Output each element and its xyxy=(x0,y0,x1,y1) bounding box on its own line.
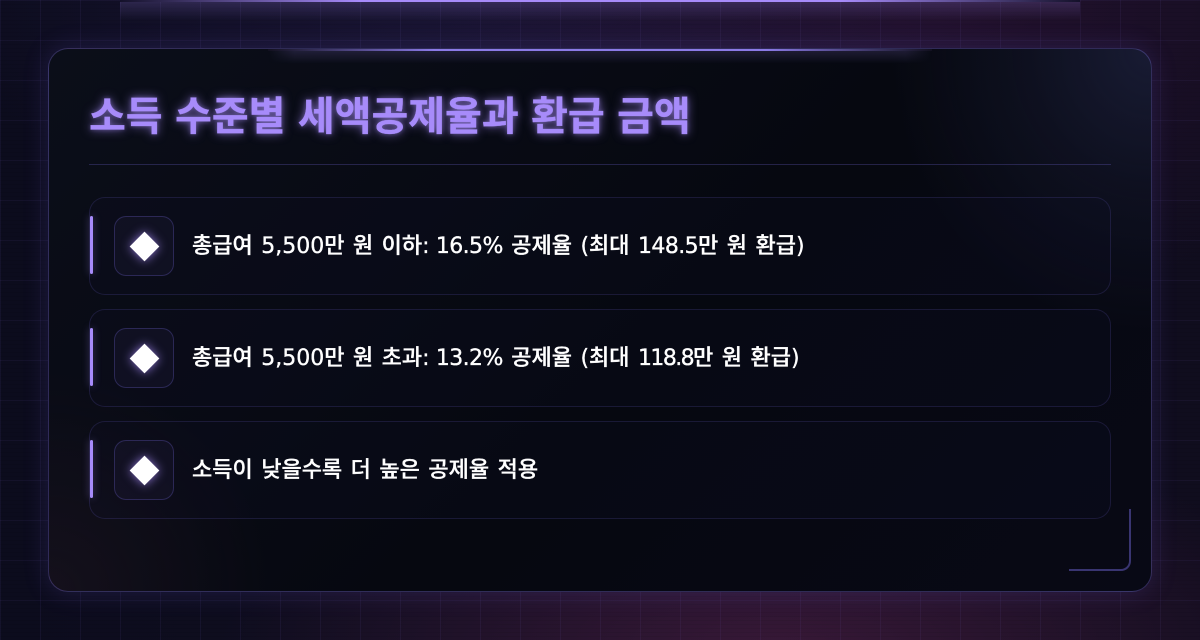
panel: main card xyxy=(48,48,1152,592)
text: deduction rate at or below threshold: 총급여 5,500만 원 이하: 16.5% 공제율 (최대 148.5만 원 환급) xyxy=(192,234,805,259)
text: lower income gets higher rate: 소득이 낮을수록 더 높은 공제율 적용 xyxy=(192,458,538,483)
text: deduction rate above threshold: 총급여 5,500만 원 초과: 13.2% 공제율 (최대 118.8만 원 환급) xyxy=(192,346,800,371)
list item: lower income note xyxy=(89,421,1111,519)
icon: white diamond xyxy=(114,440,174,500)
icon: white diamond xyxy=(114,216,174,276)
list item: income up to 55 million won xyxy=(89,197,1111,295)
list item: income above 55 million won xyxy=(89,309,1111,407)
icon: white diamond xyxy=(114,328,174,388)
title: 소득 수준별 세액공제율과 환급 금액 xyxy=(89,94,691,140)
